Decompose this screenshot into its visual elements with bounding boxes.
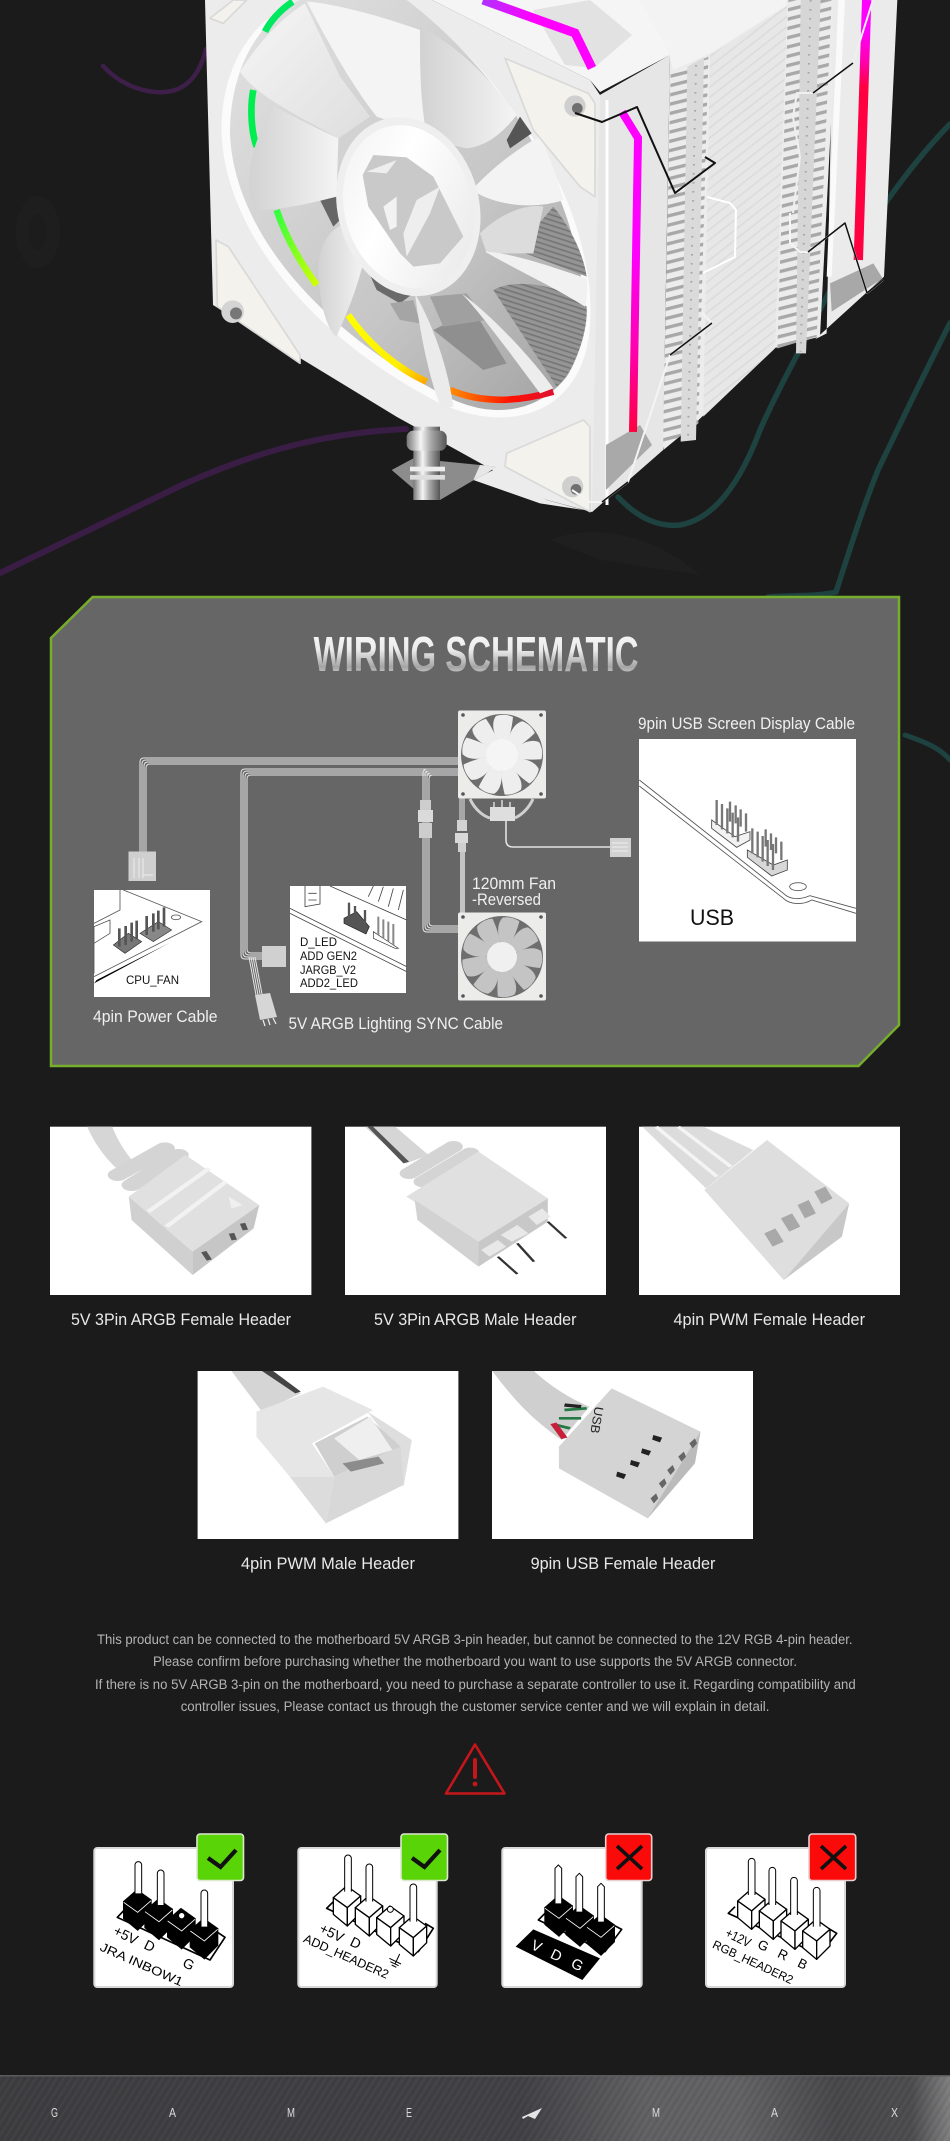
caption: 4pin PWM male header: 4pin PWM Male Header [241, 1555, 415, 1573]
connector: 4pin power plug [128, 852, 156, 881]
text block: compatibility note: controller issues, Please contact us through the customer service center and we will explain in detail. [181, 1699, 769, 1714]
label: USB: USB [690, 905, 734, 930]
header icon: black pins [98, 1862, 225, 1989]
badge: check [197, 1834, 244, 1880]
footer wordmark: M [652, 2105, 660, 2120]
header icon: white pins: ADD_HEADER2 [301, 1932, 391, 1982]
footer band [0, 2075, 950, 2141]
header icon: 12V white pins [710, 1858, 837, 1987]
RGB ring [251, 2, 553, 400]
wire: USB cable [506, 821, 610, 847]
badge: check [401, 1834, 448, 1880]
header icon: white pins [301, 1855, 433, 1982]
text block: compatibility note: This product can be connected to the motherboard 5V ARGB 3-pin header, but cannot be connected to the 12V RGB 4-pin header. [97, 1632, 852, 1647]
fan hub with logo [317, 101, 500, 313]
label: 120mm fan reversed: 120mm Fan [472, 875, 556, 893]
text block: compatibility note [95, 1632, 856, 1714]
box: CPU fan header diagram [94, 890, 210, 997]
footer wordmark: A [771, 2105, 778, 2120]
label: CPU_FAN: CPU_FAN [126, 973, 179, 987]
label: 120mm fan reversed: -Reversed [472, 891, 541, 909]
cooler product image [205, 0, 897, 512]
connector: USB plug [610, 838, 631, 857]
card: +5V D G ADD_HEADER2 compatible [298, 1834, 448, 1987]
header icon: 12V white pins: G [755, 1937, 771, 1955]
photo: 5V 3Pin ARGB male header [345, 1127, 606, 1295]
photo: 4pin PWM male header [198, 1371, 458, 1539]
cooler base under top fan [470, 799, 533, 821]
header icon: black pins: D [142, 1936, 158, 1955]
connector: ARGB lead plug [262, 946, 286, 967]
caption: 5V 3Pin ARGB male header: 5V 3Pin ARGB Male Header [374, 1311, 577, 1329]
wires: 4pin power cable [140, 758, 458, 852]
rear fan side with magenta stripe [815, 0, 897, 339]
label: 120mm fan reversed [472, 875, 556, 909]
badge: cross [809, 1834, 856, 1880]
caption: 4pin PWM female header: 4pin PWM Female Header [674, 1311, 865, 1329]
connector: inline ARGB plug [418, 800, 433, 838]
fan opening and blades [222, 0, 591, 417]
header icon: white pins: D [348, 1933, 364, 1952]
header icon: white pins: +5V [317, 1920, 347, 1946]
header icon: 3 black pins [516, 1865, 622, 1980]
label: USB printed on connector: USB [587, 1405, 606, 1434]
box: ARGB header diagram [290, 886, 407, 993]
front fan body [205, 0, 670, 512]
card: V D G not compatible [502, 1834, 652, 1987]
label: 4pin power cable: 4pin Power Cable [93, 1008, 218, 1026]
fan top recess [533, 0, 632, 68]
header icon: 12V white pins: B [795, 1955, 810, 1973]
text block: compatibility note: Please confirm before purchasing whether the motherboard you want to use supports the 5V ARGB connector. [153, 1654, 797, 1669]
footer wordmark: A [169, 2105, 176, 2120]
wires: ARGB sync cable [241, 769, 464, 995]
label: motherboard header names: D_LED [300, 935, 337, 949]
label: motherboard header names [300, 935, 358, 990]
retention wire clips [572, 0, 883, 502]
header icon: 12V white pins: +12V [723, 1925, 754, 1950]
header icon: black pins: +5V [111, 1922, 141, 1948]
footer wordmark: E [406, 2105, 412, 2120]
badge: cross [606, 1834, 652, 1880]
label: 9pin USB cable: 9pin USB Screen Display Cable [638, 715, 855, 733]
background swooshes [0, 49, 950, 760]
panel: wiring schematic [51, 597, 899, 1066]
header icon: black pins: JRA INBOW1 [98, 1940, 185, 1989]
connector: fan to fan cable [455, 820, 468, 913]
fan mounting holes [221, 95, 586, 497]
photo: 4pin PWM female header [639, 1127, 900, 1295]
top fan [458, 710, 546, 798]
footer wordmark [51, 2105, 898, 2120]
text block: compatibility note: If there is no 5V ARGB 3-pin on the motherboard, you need to purchase a separate controller to use it. Regarding compatibility and [95, 1677, 856, 1692]
bottom fan [458, 912, 546, 1000]
footer wordmark: M [287, 2105, 295, 2120]
footer wordmark: X [891, 2105, 898, 2120]
heading: wiring schematic: WIRING SCHEMATIC [314, 628, 639, 682]
card: +5V D G JRAINBOW1 compatible [94, 1834, 244, 1989]
fan top face [432, 0, 670, 92]
blades [240, 3, 370, 138]
label: motherboard header names: ADD GEN2 [300, 949, 357, 963]
side vent window [606, 425, 652, 490]
mounting bracket and screw [392, 427, 583, 510]
header icon: 12V white pins: RGB_HEADER2 [710, 1937, 796, 1987]
lit stripe front side [483, 0, 592, 68]
header icon: 12V white pins: R [775, 1946, 791, 1964]
fan corner panels [210, 0, 595, 512]
heatsink fin stack [600, 0, 837, 450]
icon: warning triangle [446, 1744, 504, 1794]
label: motherboard header names: ADD2_LED [300, 976, 358, 990]
box: USB header diagram [639, 739, 856, 942]
header icon: 3 black pins: V [528, 1938, 544, 1956]
card: +12V G R B not compatible [706, 1834, 856, 1987]
caption: 5V 3Pin ARGB female header: 5V 3Pin ARGB Female Header [71, 1311, 291, 1329]
header icon: black pins: G [180, 1954, 197, 1973]
header icon: 3 black pins: G [568, 1956, 586, 1975]
footer wordmark: G [51, 2105, 58, 2120]
header icon: 3 black pins: D [548, 1947, 564, 1966]
caption: 9pin USB female header: 9pin USB Female Header [531, 1555, 716, 1573]
connector: 3pin male plug [255, 993, 277, 1026]
label: motherboard header names: JARGB_V2 [300, 963, 356, 977]
photo: 5V 3Pin ARGB female header [50, 1127, 311, 1295]
label: 5V ARGB sync cable: 5V ARGB Lighting SYNC Cable [288, 1015, 503, 1033]
photo: 9pin USB female header [492, 1371, 753, 1539]
fan side panel [592, 55, 670, 512]
